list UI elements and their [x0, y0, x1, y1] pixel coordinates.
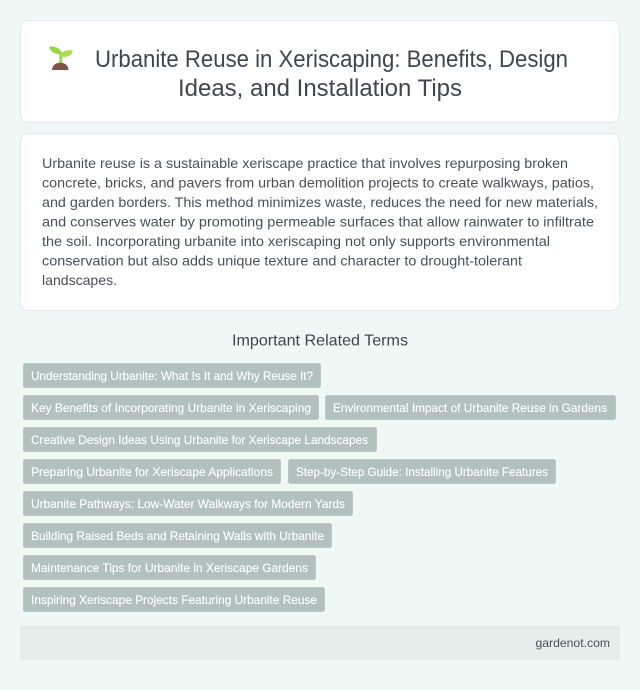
tag	[24, 492, 352, 516]
tag: Urbanite Pathways: Low-Water Walkways for Modern Yards	[31, 497, 345, 511]
tag: Inspiring Xeriscape Projects Featuring Urbanite Reuse	[31, 593, 317, 607]
tag: Preparing Urbanite for Xeriscape Applications	[31, 465, 273, 479]
heading: related terms: Important Related Terms	[232, 332, 408, 350]
panel: description text: the soil. Incorporating urbanite into xeriscaping not only supports environmental	[42, 233, 550, 249]
footer: gardenot.com	[536, 636, 610, 650]
tag	[24, 364, 320, 388]
tag	[24, 524, 332, 548]
icon: seedling	[49, 46, 73, 70]
panel: description text: Urbanite reuse is a sustainable xeriscape practice that involves repurposing broken	[42, 155, 568, 171]
tag: Environmental Impact of Urbanite Reuse in Gardens	[333, 401, 607, 415]
tag	[326, 396, 616, 420]
tag list: related terms	[24, 364, 616, 612]
tag	[24, 460, 280, 484]
panel: description text	[20, 134, 620, 310]
footer	[20, 626, 620, 660]
tag	[24, 396, 318, 420]
title: Urbanite Reuse in Xeriscaping: Benefits, Design	[95, 46, 568, 73]
tag: Maintenance Tips for Urbanite in Xeriscape Gardens	[31, 561, 308, 575]
tag: Step-by-Step Guide: Installing Urbanite Features	[296, 465, 548, 479]
tag	[24, 556, 316, 580]
panel: description text: concrete, bricks, and pavers from urban demolition projects to create walkways, patios,	[42, 174, 594, 190]
panel: title card	[20, 20, 620, 122]
tag: Building Raised Beds and Retaining Walls with Urbanite	[31, 529, 324, 543]
panel: description text: landscapes.	[42, 272, 117, 288]
tag: Understanding Urbanite: What Is It and Why Reuse It?	[31, 369, 313, 383]
tag	[24, 588, 324, 612]
tag: Creative Design Ideas Using Urbanite for Xeriscape Landscapes	[31, 433, 368, 447]
tag	[24, 428, 376, 452]
title: Ideas, and Installation Tips	[178, 75, 462, 102]
title	[95, 46, 568, 102]
tag: Key Benefits of Incorporating Urbanite in Xeriscaping	[31, 401, 311, 415]
panel: description text: and garden borders. This method minimizes waste, reduces the need for new materials,	[42, 194, 598, 210]
tag	[288, 460, 556, 484]
panel: description text: conservation but also adds unique texture and character to drought-tolerant	[42, 252, 522, 268]
panel: description text: and conserves water by promoting permeable surfaces that allow rainwater to infiltrate	[42, 214, 594, 230]
